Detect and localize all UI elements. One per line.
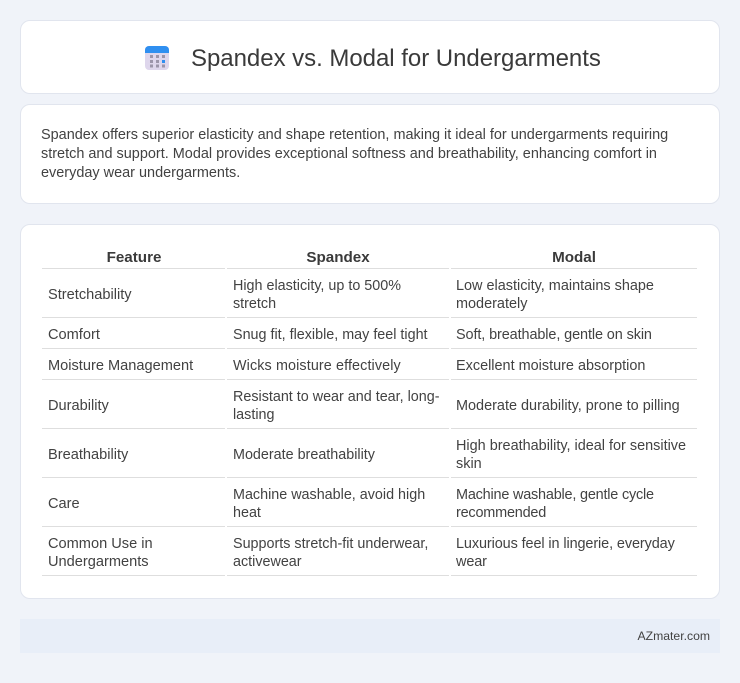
- icon: calendar: [145, 46, 169, 70]
- panel: summary: [20, 104, 720, 204]
- row: Care: [48, 487, 654, 521]
- row: Care: heat: [233, 505, 261, 521]
- row: Stretchability: moderately: [456, 296, 527, 312]
- row: Common Use in Undergarments: Supports stretch-fit underwear,: [233, 536, 428, 552]
- row: Breathability: High breathability, ideal for sensitive: [456, 438, 686, 454]
- row: Care: recommended: [456, 505, 546, 521]
- row: Stretchability: High elasticity, up to 500%: [233, 278, 401, 294]
- footer credit: AZmater.com: [638, 629, 710, 643]
- row: Stretchability: Low elasticity, maintains shape: [456, 278, 654, 294]
- row: Durability: [48, 389, 680, 423]
- summary text: stretch and support. Modal provides exceptional softness and breathability, enhancing comfort in: [41, 146, 657, 162]
- panel: title card: [20, 20, 720, 94]
- row: Durability: Durability: [48, 398, 109, 414]
- header: Feature: Feature: [107, 249, 161, 266]
- row: Comfort: Comfort: [48, 327, 100, 343]
- row: Moisture Management: Excellent moisture absorption: [456, 358, 645, 374]
- row: Care: Machine washable, gentle cycle: [456, 487, 654, 503]
- summary text: everyday wear undergarments.: [41, 165, 240, 181]
- row: Common Use in Undergarments: wear: [456, 554, 487, 570]
- title: Spandex vs. Modal for Undergarments: [191, 45, 601, 72]
- row: Common Use in Undergarments: Undergarments: [48, 554, 149, 570]
- summary text: [41, 127, 668, 181]
- footer bar: [20, 619, 720, 653]
- row: Stretchability: [48, 278, 654, 312]
- row: Common Use in Undergarments: Common Use in: [48, 536, 153, 552]
- row: Comfort: [48, 327, 652, 343]
- row: Common Use in Undergarments: [48, 536, 675, 570]
- panel: comparison table: [20, 224, 720, 599]
- header: Modal: Modal: [552, 249, 596, 266]
- row: Breathability: Moderate breathability: [233, 447, 375, 463]
- row: Durability: lasting: [233, 407, 274, 423]
- row: Breathability: Breathability: [48, 447, 128, 463]
- row: Stretchability: stretch: [233, 296, 276, 312]
- row: Stretchability: Stretchability: [48, 287, 132, 303]
- row: Durability: Resistant to wear and tear, long-: [233, 389, 440, 405]
- table: [42, 249, 697, 576]
- header: Spandex: Spandex: [306, 249, 370, 266]
- row: Moisture Management: [48, 358, 645, 374]
- row: Breathability: [48, 438, 686, 472]
- row: Comfort: Soft, breathable, gentle on skin: [456, 327, 652, 343]
- row: Durability: Moderate durability, prone to pilling: [456, 398, 680, 414]
- row: Comfort: Snug fit, flexible, may feel tight: [233, 327, 428, 343]
- row: Moisture Management: Wicks moisture effectively: [233, 358, 401, 374]
- row: Common Use in Undergarments: activewear: [233, 554, 302, 570]
- row: Common Use in Undergarments: Luxurious feel in lingerie, everyday: [456, 536, 675, 552]
- row: Care: Care: [48, 496, 80, 512]
- row: Care: Machine washable, avoid high: [233, 487, 425, 503]
- row: Breathability: skin: [456, 456, 482, 472]
- summary text: Spandex offers superior elasticity and shape retention, making it ideal for undergarments requiring: [41, 127, 668, 143]
- row: Moisture Management: Moisture Management: [48, 358, 193, 374]
